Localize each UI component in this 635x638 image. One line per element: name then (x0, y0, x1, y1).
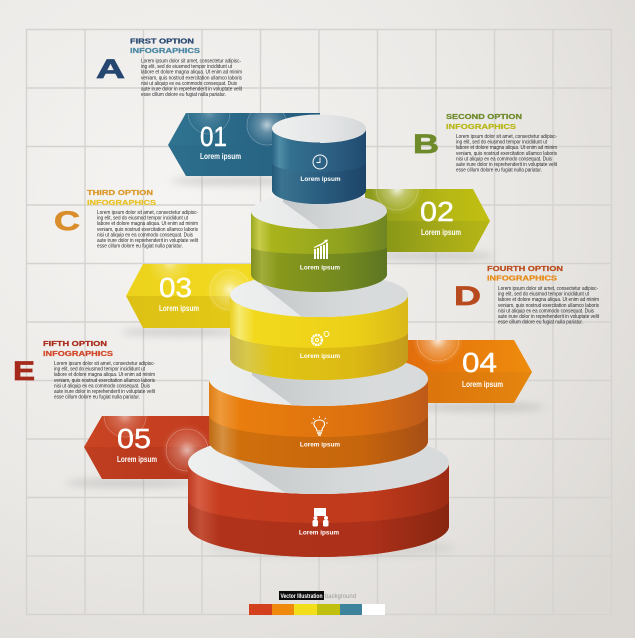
panel: option E (13, 341, 156, 400)
body text D: Lorem ipsum dolor sit amet, consectetur adipisc- (498, 286, 598, 292)
heading: first option: FIRST OPTION (130, 38, 194, 46)
letter E: E (13, 356, 35, 386)
arrow 04 (400, 340, 540, 414)
colour palette (249, 604, 385, 615)
number 03: 03 (159, 272, 192, 303)
body text D: nisi ut aliquip ex ea commodo consequat. Duis (498, 308, 594, 314)
label: Lorem ipsum (300, 442, 340, 448)
heading: fifth option: FIFTH OPTION (43, 341, 107, 348)
panel: option A (96, 38, 243, 98)
body text E: ing elit, sed do eiusmod tempor incididunt ut (54, 366, 145, 372)
body text B: veniam, quis nostrud exercitation ullamco laboris (456, 151, 557, 157)
letter D: D (454, 281, 481, 311)
label: Lorem ipsum (117, 455, 157, 464)
body text E: nisi ut aliquip ex ea commodo consequat. Duis (54, 384, 150, 390)
panel: option B (413, 114, 558, 174)
label: Lorem ipsum (200, 152, 241, 161)
heading: fourth option: FOURTH OPTION (487, 266, 563, 273)
number 05: 05 (117, 423, 151, 454)
body text A: nisi ut aliquip ex ea commodo consequat. Duis (141, 81, 237, 87)
icon: people with speech box (312, 508, 328, 526)
label: Lorem ipsum (300, 264, 340, 272)
body text B: esse cillum dolore eu fugiat nulla pariatur. (456, 168, 542, 174)
letter B: B (413, 129, 439, 159)
panel: option C (54, 190, 199, 250)
heading: infographics: INFOGRAPHICS (43, 351, 113, 358)
heading: infographics: INFOGRAPHICS (87, 200, 156, 207)
body text A: aute irure dolor in reprehenderit in voluptate velit (141, 86, 243, 92)
body text A: ing elit, sed do eiusmod tempor incididunt ut (141, 64, 232, 70)
icon: bar chart (314, 240, 328, 259)
body text A (141, 58, 243, 98)
label: Lorem ipsum (462, 380, 503, 389)
arrow 01 (168, 113, 320, 188)
body text D: veniam, quis nostrud exercitation ullamco laboris (498, 303, 599, 309)
heading: third option: THIRD OPTION (87, 190, 153, 197)
letter A: A (96, 54, 125, 84)
body text C: nisi ut aliquip ex ea commodo consequat. Duis (97, 232, 193, 238)
cylinder tier: yellow (230, 280, 408, 380)
watermark label (279, 591, 357, 600)
body text E: aute irure dolor in reprehenderit in voluptate velit (54, 389, 156, 395)
body text D: aute irure dolor in reprehenderit in voluptate velit (498, 314, 600, 320)
cylinder tier: green (251, 196, 387, 292)
cylinder tier: red (188, 446, 449, 557)
icon: light bulb (311, 416, 328, 435)
body text D: ing elit, sed do eiusmod tempor incididunt ut (498, 292, 589, 298)
body text C: ing elit, sed do eiusmod tempor incididunt ut (97, 216, 188, 222)
body text C: Lorem ipsum dolor sit amet, consectetur adipisc- (97, 210, 198, 216)
body text A: Lorem ipsum dolor sit amet, consectetur adipisc- (141, 58, 241, 64)
body text E (54, 361, 156, 400)
body text C: aute irure dolor in reprehenderit in voluptate velit (97, 238, 199, 244)
arrow 03 (124, 264, 280, 339)
icon: clock (313, 155, 327, 169)
icon: gears (312, 332, 329, 345)
body text B: labore et dolore magna aliqua. Ut enim ad minim (456, 145, 557, 151)
body text B: Lorem ipsum dolor sit amet, consectetur adipisc- (456, 134, 557, 140)
body text B (456, 134, 558, 174)
watermark label: Vector Illustration (280, 593, 323, 600)
body text E: veniam, quis nostrud exercitation ullamco laboris (54, 378, 155, 384)
body text C (97, 210, 199, 250)
body text D: esse cillum dolore eu fugiat nulla pariatur. (498, 320, 583, 326)
body text E: labore et dolore magna aliqua. Ut enim ad minim (54, 372, 155, 378)
label: Lorem ipsum (421, 228, 461, 237)
label: Lorem ipsum (299, 530, 339, 536)
label: Lorem ipsum (300, 176, 341, 183)
arrow 05 (70, 416, 210, 490)
heading: infographics: INFOGRAPHICS (487, 276, 557, 282)
heading: infographics: INFOGRAPHICS (130, 48, 200, 55)
heading: infographics: INFOGRAPHICS (446, 124, 516, 131)
cylinder tier: blue (272, 114, 366, 204)
body text D: labore et dolore magna aliqua. Ut enim ad minim (498, 297, 599, 303)
watermark label: background (325, 593, 357, 600)
body text B: nisi ut aliquip ex ea commodo consequat. Duis (456, 156, 552, 162)
body text D (498, 286, 600, 326)
number 02: 02 (420, 196, 454, 227)
label: Lorem ipsum (300, 353, 340, 360)
letter C: C (54, 206, 80, 236)
body text B: aute irure dolor in reprehenderit in voluptate velit (456, 162, 558, 168)
panel: option D (454, 266, 600, 326)
body text E: Lorem ipsum dolor sit amet, consectetur adipisc- (54, 361, 155, 367)
label: Lorem ipsum (159, 304, 199, 313)
body text C: labore et dolore magna aliqua. Ut enim ad minim (97, 221, 198, 227)
body text B: ing elit, sed do eiusmod tempor incididunt ut (456, 140, 547, 146)
number 01: 01 (200, 121, 227, 152)
body text A: esse cillum dolore eu fugiat nulla pariatur. (141, 92, 226, 98)
cylinder tier: orange (209, 362, 428, 468)
body text E: esse cillum dolore eu fugiat nulla pariatur. (54, 394, 140, 400)
arrow 02 (365, 189, 490, 262)
body text A: labore et dolore magna aliqua. Ut enim ad minim (141, 70, 242, 76)
number 04: 04 (462, 347, 497, 378)
body text C: esse cillum dolore eu fugiat nulla pariatur. (97, 244, 183, 250)
body text A: veniam, quis nostrud exercitation ullamco laboris (141, 76, 242, 82)
body text C: veniam, quis nostrud exercitation ullamco laboris (97, 227, 198, 233)
heading: second option: SECOND OPTION (446, 114, 522, 121)
